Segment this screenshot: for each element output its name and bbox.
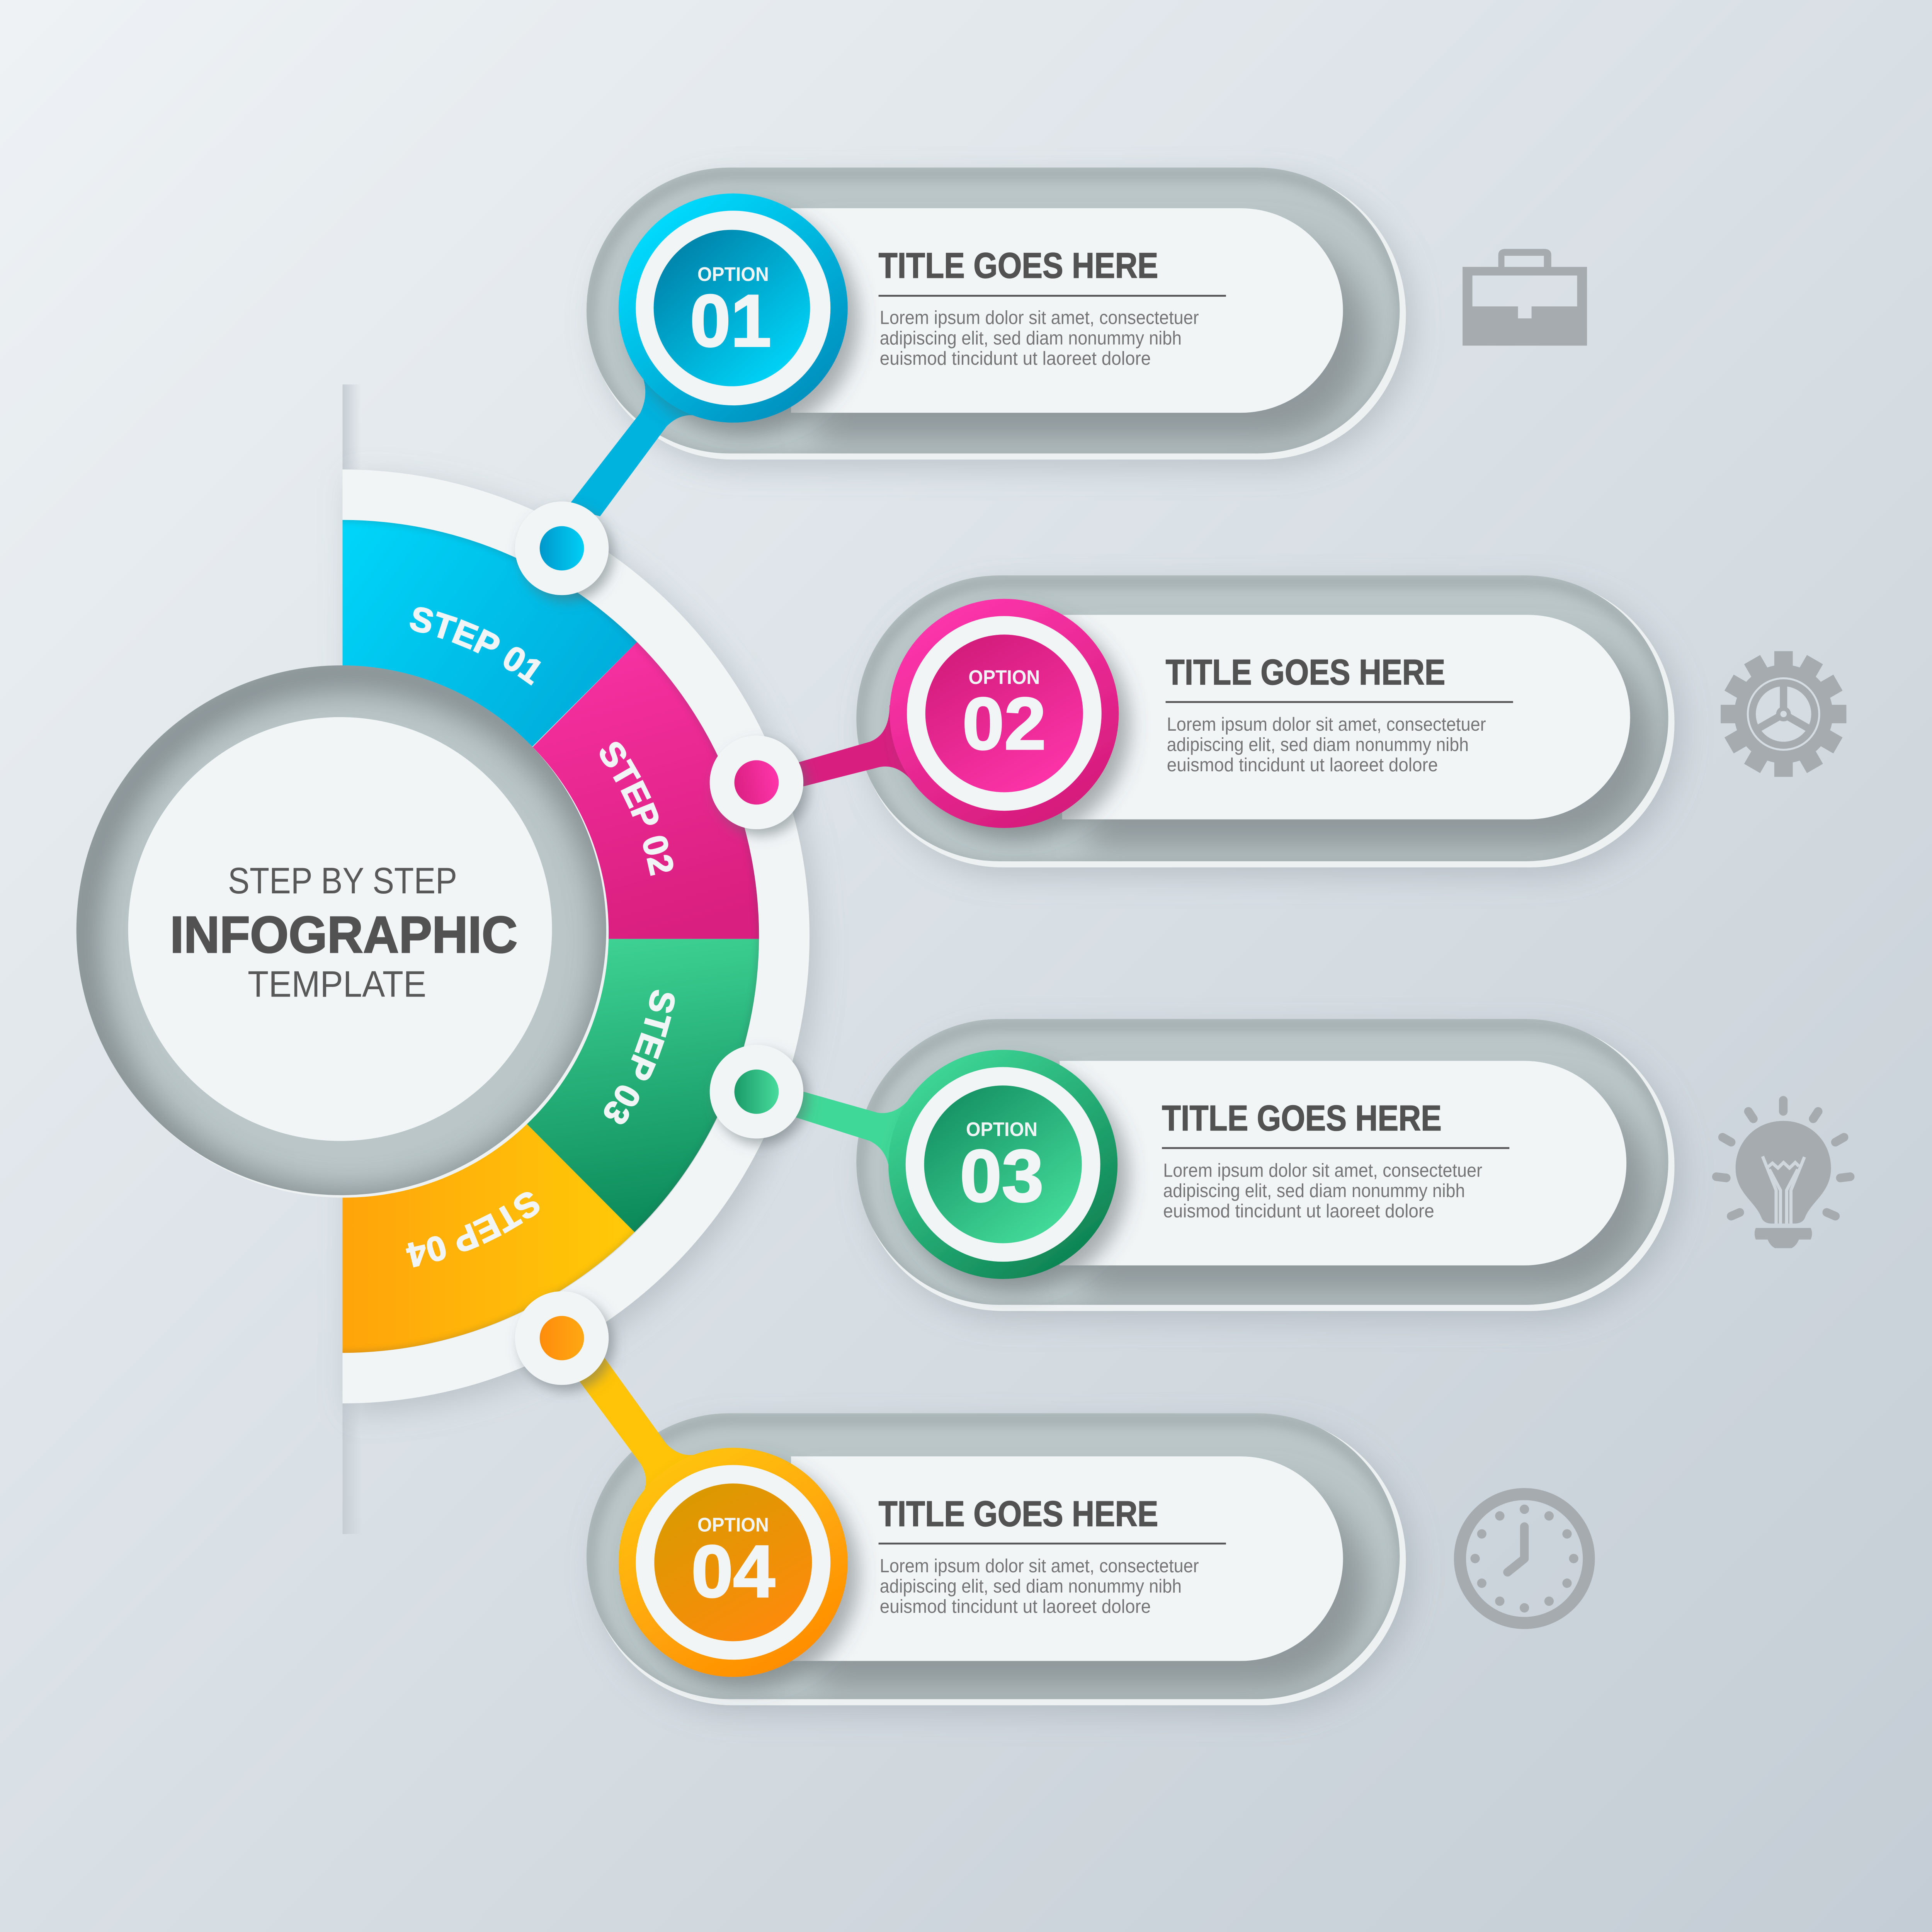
segment: step 03 bbox=[342, 939, 759, 1232]
title: TITLE GOES HERE bbox=[1162, 1098, 1442, 1138]
vertical strip bbox=[342, 384, 361, 1534]
body text bbox=[880, 1555, 1199, 1617]
body text: euismod tincidunt ut laoreet dolore bbox=[1163, 1201, 1434, 1222]
pill slot bbox=[856, 575, 1668, 861]
badge ring bbox=[636, 1465, 830, 1660]
badge core bbox=[654, 230, 810, 386]
badge core bbox=[654, 1483, 812, 1641]
centre circle bbox=[77, 665, 617, 1209]
label: step 03: STEP 03 bbox=[595, 986, 683, 1131]
connector bbox=[789, 705, 918, 789]
semicircle wheel bbox=[339, 469, 825, 1419]
badge ring bbox=[636, 211, 830, 405]
node: step 03 bbox=[710, 1045, 803, 1138]
option label: OPTION bbox=[966, 1118, 1037, 1140]
centre headline: INFOGRAPHIC bbox=[170, 906, 517, 964]
title: TITLE GOES HERE bbox=[1166, 652, 1445, 692]
icon: gear bbox=[1721, 651, 1846, 777]
label: step 02: STEP 02 bbox=[591, 734, 682, 878]
option number: 02 bbox=[962, 682, 1046, 765]
panel: option 04 bbox=[577, 1352, 1406, 1705]
centre subtitle: TEMPLATE bbox=[248, 964, 426, 1005]
option number: 01 bbox=[690, 279, 771, 362]
body text: Lorem ipsum dolor sit amet, consectetuer bbox=[1163, 1160, 1482, 1181]
option number: 03 bbox=[960, 1134, 1044, 1217]
option badge bbox=[888, 1050, 1117, 1279]
node: step 02 bbox=[710, 736, 803, 829]
option badge bbox=[619, 194, 848, 423]
pill slot bbox=[856, 1019, 1668, 1305]
panel: option 03 bbox=[789, 1019, 1675, 1311]
rim bbox=[79, 668, 609, 1197]
option label: OPTION bbox=[968, 666, 1040, 688]
body text: euismod tincidunt ut laoreet dolore bbox=[880, 348, 1151, 369]
label: step 04: STEP 04 bbox=[403, 1183, 548, 1275]
label: step 01: STEP 01 bbox=[406, 599, 550, 691]
panel: option 01 bbox=[567, 168, 1406, 516]
inner disc bbox=[128, 717, 552, 1141]
option label: OPTION bbox=[697, 263, 769, 285]
node: step 01 bbox=[515, 502, 609, 595]
title: TITLE GOES HERE bbox=[879, 1493, 1158, 1534]
content card bbox=[1060, 1061, 1626, 1265]
body text: adipiscing elit, sed diam nonummy nibh bbox=[1163, 1180, 1465, 1201]
content card bbox=[791, 1456, 1343, 1661]
body text: adipiscing elit, sed diam nonummy nibh bbox=[880, 327, 1182, 349]
pill rim bbox=[859, 1021, 1675, 1311]
pill slot bbox=[587, 1413, 1400, 1699]
segment: step 01 bbox=[342, 520, 637, 936]
recessed slot bbox=[77, 665, 606, 1195]
badge ring bbox=[907, 616, 1102, 811]
body text: euismod tincidunt ut laoreet dolore bbox=[1167, 754, 1438, 776]
option badge bbox=[889, 599, 1119, 828]
body text bbox=[880, 307, 1199, 369]
node: step 04 bbox=[515, 1291, 609, 1385]
panel: option 02 bbox=[789, 575, 1675, 867]
option number: 04 bbox=[691, 1530, 775, 1613]
body text: adipiscing elit, sed diam nonummy nibh bbox=[880, 1575, 1182, 1597]
icon: clock bbox=[1460, 1494, 1589, 1623]
body text: Lorem ipsum dolor sit amet, consectetuer bbox=[880, 307, 1199, 328]
pill slot bbox=[587, 168, 1400, 453]
white arc band bbox=[342, 469, 810, 1403]
body text: Lorem ipsum dolor sit amet, consectetuer bbox=[880, 1555, 1199, 1577]
badge ring bbox=[906, 1067, 1100, 1262]
connector bbox=[567, 371, 705, 516]
body text bbox=[1167, 714, 1486, 776]
title: TITLE GOES HERE bbox=[879, 245, 1158, 286]
pill rim bbox=[589, 1416, 1406, 1705]
icon: briefcase bbox=[1463, 249, 1587, 345]
icon: light bulb bbox=[1716, 1100, 1850, 1248]
body text bbox=[1163, 1160, 1482, 1222]
connector bbox=[789, 1089, 917, 1177]
badge core bbox=[924, 1085, 1082, 1243]
pill rim bbox=[859, 578, 1675, 867]
body text: euismod tincidunt ut laoreet dolore bbox=[880, 1596, 1151, 1617]
option label: OPTION bbox=[697, 1514, 769, 1536]
connector bbox=[577, 1352, 705, 1500]
option badge bbox=[619, 1448, 848, 1677]
body text: Lorem ipsum dolor sit amet, consectetuer bbox=[1167, 714, 1486, 735]
centre title: STEP BY STEP bbox=[228, 860, 457, 901]
segment: step 04 bbox=[342, 939, 634, 1353]
content card bbox=[1062, 615, 1630, 820]
body text: adipiscing elit, sed diam nonummy nibh bbox=[1167, 734, 1469, 755]
segment: step 02 bbox=[342, 642, 759, 939]
pill rim bbox=[589, 170, 1406, 459]
content card bbox=[791, 208, 1343, 413]
badge core bbox=[925, 634, 1083, 792]
